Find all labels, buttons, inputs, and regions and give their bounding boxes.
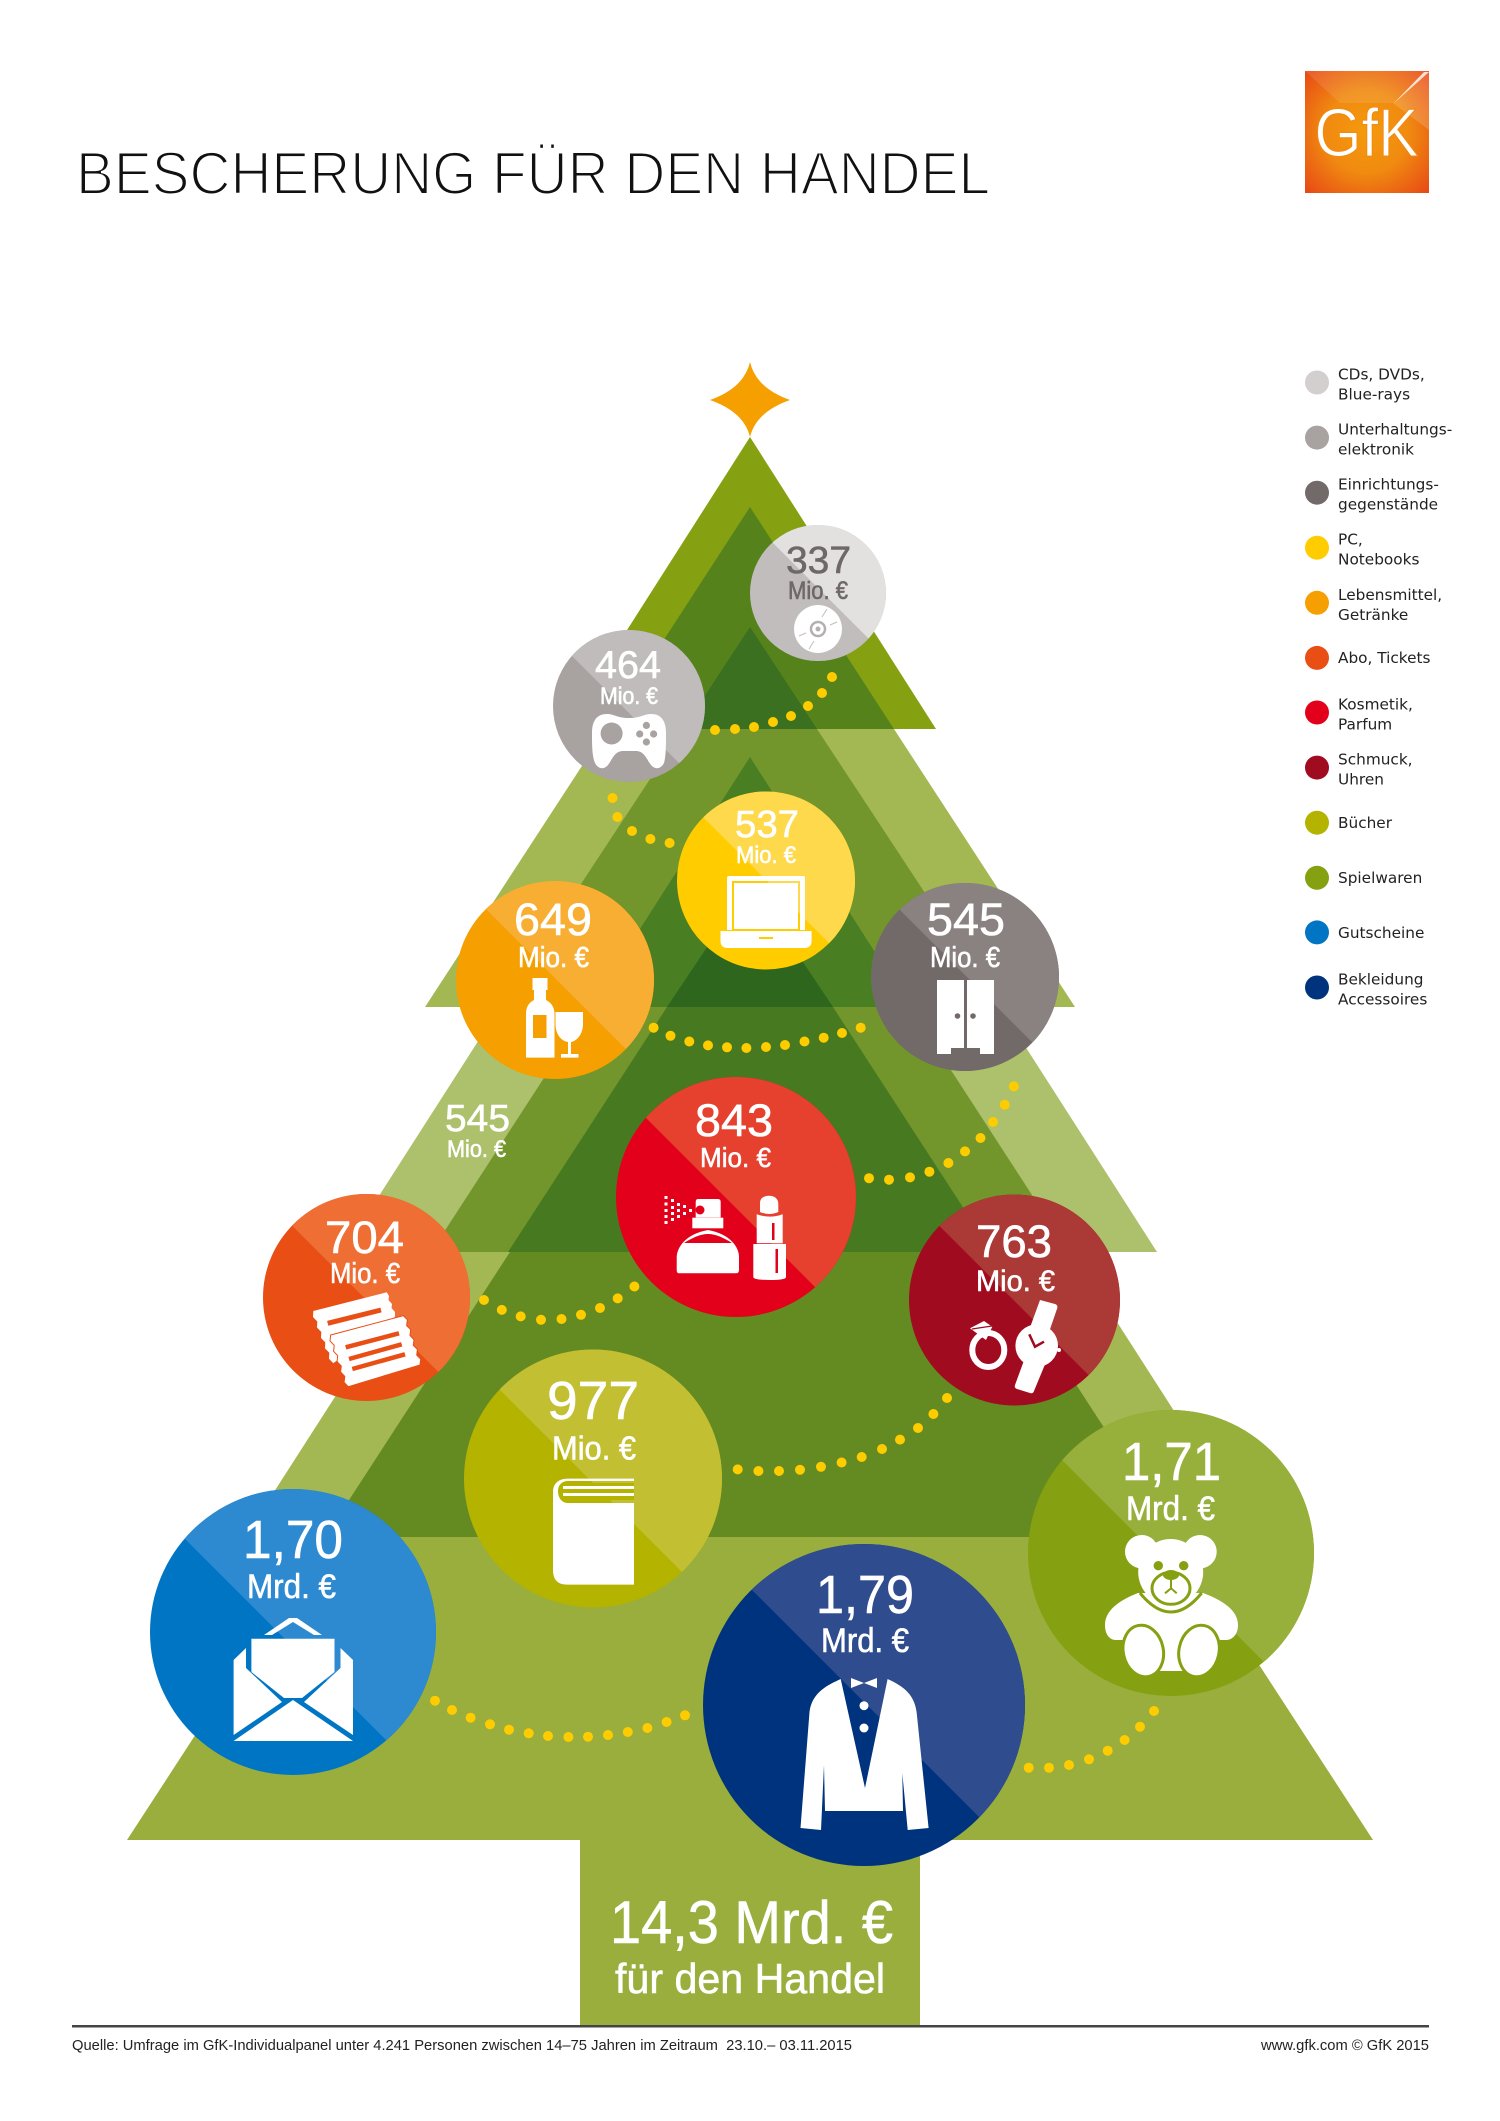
value: 1,79 <box>816 1565 914 1625</box>
star on tree top <box>710 362 790 437</box>
logo: GfK <box>1305 71 1429 193</box>
unit: Mio. € <box>788 577 848 605</box>
stray label: 545 Mio. € on tree: 545 <box>445 1098 510 1140</box>
value: 537 <box>735 804 799 846</box>
legend item: CDs: Blue-rays <box>1338 386 1410 404</box>
legend item: jewellery: Uhren <box>1338 771 1384 789</box>
legend item: tickets <box>1305 646 1431 670</box>
icon: bottle and glass <box>526 978 583 1058</box>
badge: toys 1,71 Mrd. € <box>1028 1410 1314 1696</box>
trunk label: total: für den Handel <box>615 1955 885 2002</box>
badge: food 649 Mio. € <box>456 881 654 1079</box>
unit: Mrd. € <box>821 1622 909 1660</box>
unit: Mio. € <box>518 942 589 974</box>
third tier <box>343 1007 1157 1252</box>
legend item: clothing <box>1305 970 1427 1008</box>
trunk label: total: 14,3 Mrd. € <box>610 1889 893 1956</box>
icon: laptop <box>720 876 812 948</box>
bottom tier with trunk <box>127 1537 1373 2026</box>
legend item: cosmetics: Kosmetik, <box>1338 696 1413 714</box>
legend item: CDs: CDs, DVDs, <box>1338 366 1425 384</box>
badge: furniture 545 Mio. € <box>871 883 1059 1071</box>
fourth tier <box>245 1252 1255 1537</box>
icon: tickets <box>313 1292 421 1387</box>
badge: clothing 1,79 Mrd. € <box>703 1544 1025 1866</box>
garland dots: vouchers to clothing <box>430 1696 690 1742</box>
legend item: food: Lebensmittel, <box>1338 586 1442 604</box>
stray label: 545 Mio. € on tree: Mio. € <box>447 1136 507 1163</box>
garland dots: games to laptop <box>608 793 675 848</box>
value: 704 <box>325 1212 404 1263</box>
icon: gamepad <box>592 714 666 768</box>
garland dots: CDs to games <box>710 672 837 735</box>
legend item: PC: PC, <box>1338 531 1363 549</box>
legend item: entertainment electronics: Unterhaltungs- <box>1338 421 1452 439</box>
legend item: furniture <box>1305 476 1439 514</box>
icon: disc <box>794 605 842 653</box>
value: 1,71 <box>1122 1432 1221 1492</box>
legend item: books: Bücher <box>1338 814 1393 832</box>
legend item: toys: Spielwaren <box>1338 869 1422 887</box>
icon: perfume and lipstick <box>664 1196 786 1280</box>
legend <box>1305 366 1452 1008</box>
badge: PC 537 Mio. € <box>677 792 855 970</box>
value: 545 <box>927 894 1005 945</box>
logo: GfK: GfK <box>1314 95 1418 171</box>
badge: books 977 Mio. € <box>464 1350 722 1608</box>
icon: wardrobe <box>937 980 994 1054</box>
stray label: 545 Mio. € on tree <box>445 1098 510 1163</box>
unit: Mio. € <box>600 683 659 710</box>
legend item: entertainment electronics <box>1305 421 1452 459</box>
garland dots: clothing to toys <box>1024 1706 1159 1773</box>
christmas tree <box>127 437 1373 2026</box>
unit: Mio. € <box>930 942 1000 974</box>
unit: Mio. € <box>552 1430 636 1466</box>
legend item: vouchers <box>1305 920 1424 944</box>
top tier <box>564 437 936 729</box>
legend item: furniture: gegenstände <box>1338 496 1438 514</box>
legend item: CDs <box>1305 366 1425 404</box>
icon: envelope <box>234 1618 353 1741</box>
legend item: cosmetics: Parfum <box>1338 716 1392 734</box>
garland dots: jewellery to books <box>733 1393 952 1476</box>
value: 649 <box>514 894 592 945</box>
unit: Mrd. € <box>1126 1490 1215 1528</box>
value: 464 <box>595 644 661 687</box>
footer: source: Quelle: Umfrage im GfK-Individualpanel unter 4.241 Personen zwischen 14–75 Jahren im Zeitraum 23.10.– 03.11.2015 <box>72 2038 852 2054</box>
legend item: jewellery <box>1305 751 1413 789</box>
badge: games 464 Mio. € <box>553 630 705 782</box>
unit: Mio. € <box>976 1265 1055 1298</box>
legend item: jewellery: Schmuck, <box>1338 751 1413 769</box>
badge: cosmetics 843 Mio. € <box>616 1077 856 1317</box>
unit: Mio. € <box>736 842 797 869</box>
legend item: food <box>1305 586 1442 624</box>
icon: jacket with bow tie <box>800 1678 929 1830</box>
legend item: PC: Notebooks <box>1338 551 1419 569</box>
garland dots: cosmetics to tickets <box>479 1282 639 1325</box>
legend item: entertainment electronics: elektronik <box>1338 441 1414 459</box>
value: 337 <box>786 540 851 582</box>
legend item: clothing: Accessoires <box>1338 990 1427 1008</box>
footer: copyright: www.gfk.com © GfK 2015 <box>1260 2038 1429 2054</box>
badge: CDs 337 Mio. € <box>750 525 886 661</box>
unit: Mrd. € <box>247 1568 336 1606</box>
unit: Mio. € <box>700 1142 771 1173</box>
badge: vouchers 1,70 Mrd. € <box>150 1489 436 1775</box>
value: 1,70 <box>243 1510 343 1570</box>
legend item: furniture: Einrichtungs- <box>1338 476 1439 494</box>
legend item: toys <box>1305 866 1422 890</box>
legend item: PC <box>1305 531 1419 569</box>
badge: jewellery 763 Mio. € <box>909 1194 1120 1406</box>
badge: tickets 704 Mio. € <box>263 1194 470 1401</box>
legend item: vouchers: Gutscheine <box>1338 924 1424 942</box>
unit: Mio. € <box>330 1258 400 1290</box>
legend item: food: Getränke <box>1338 606 1408 624</box>
value: 763 <box>976 1216 1052 1267</box>
legend item: clothing: Bekleidung <box>1338 970 1424 988</box>
second tier <box>425 729 1075 1007</box>
icon: teddy bear <box>1105 1535 1238 1681</box>
icon: ring and watch <box>970 1300 1061 1393</box>
garland dots: furniture to cosmetics <box>864 1081 1019 1185</box>
garland dots: food to furniture <box>649 1023 866 1053</box>
title: BESCHERUNG FÜR DEN HANDEL <box>76 140 990 207</box>
value: 843 <box>695 1095 773 1146</box>
legend item: books <box>1305 811 1393 835</box>
value: 977 <box>547 1371 639 1431</box>
icon: book <box>553 1479 634 1585</box>
legend item: cosmetics <box>1305 696 1413 734</box>
trunk label: total <box>610 1889 893 2002</box>
legend item: tickets: Abo, Tickets <box>1338 649 1431 667</box>
